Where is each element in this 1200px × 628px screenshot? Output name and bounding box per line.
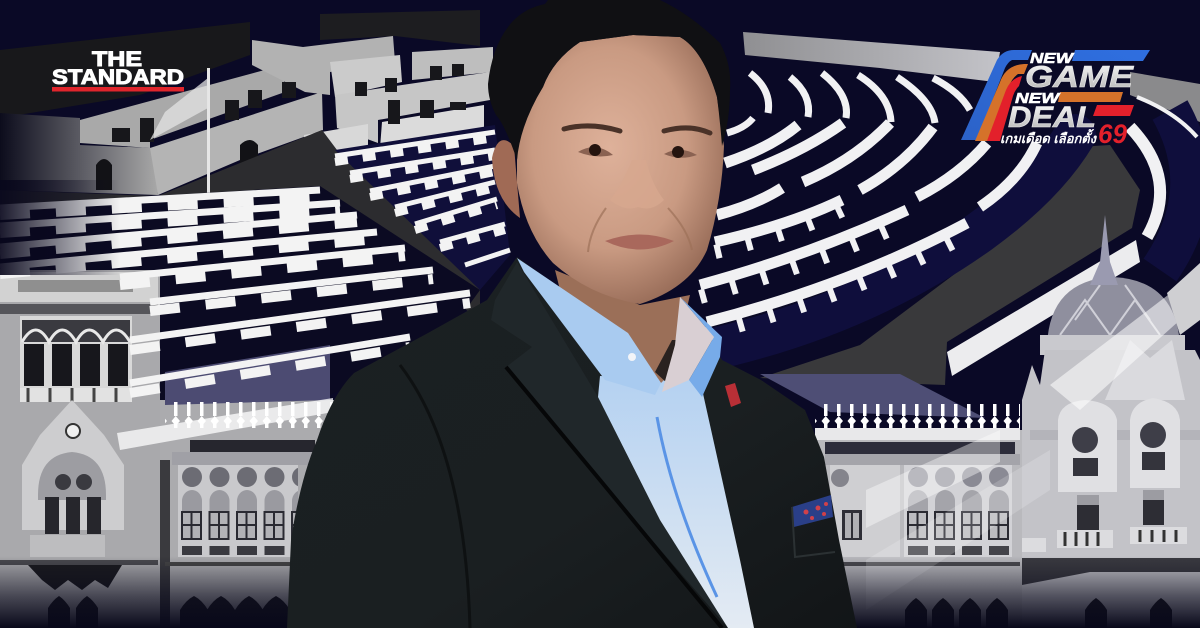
chamber: right upper wall [743,32,1200,122]
chamber: upper left walls [0,36,493,195]
left lapel [491,262,728,628]
red stripes [987,76,1134,141]
pocket flap [792,507,835,557]
chamber floor left [0,130,480,320]
logo: New Game New Deal 69 [961,50,1150,149]
building: dome [1040,215,1185,355]
chamber: right dark seat band [700,110,1190,352]
right collar inner [662,297,714,392]
chamber: right seating arcs [700,73,1197,334]
left seats dark mass [0,186,480,430]
person [287,0,857,628]
jacket [287,257,857,628]
tagline: เกมเดือด เลือกตั้ง [1000,128,1098,146]
collar button [628,353,636,361]
neck [555,270,690,383]
logo: THE STANDARD: STANDARD [52,66,184,89]
flag pole and flag [150,68,210,228]
ear [492,140,520,218]
chamber: upper left dark gallery [0,10,480,118]
chamber: left seating rows [0,190,470,393]
shirt placket [657,417,717,597]
left edge fade [0,180,120,275]
face [517,35,724,304]
lapel shadow [506,367,722,628]
translucent row across left facade [117,398,333,450]
chamber: floor right [760,145,1140,385]
game: GAME [1025,59,1135,94]
bottom fade [0,556,1200,628]
translucent diagonal light bands [866,263,1200,610]
nasolabial folds [588,208,692,252]
eyes [578,144,697,158]
building: left wing [150,345,340,628]
69: 69 [1098,119,1127,149]
shirt body [598,376,754,628]
pocket square dots [804,502,828,520]
logo: THE STANDARD [52,48,184,92]
logo: THE STANDARD: THE [92,48,142,71]
navy seats block [335,125,510,290]
chamber: right front desk [947,240,1140,376]
speaker figures [96,140,258,195]
building: left tower [0,270,160,628]
deal: DEAL [1008,101,1096,134]
right collar outer [680,297,722,397]
new: NEW [1030,50,1075,67]
arm seam [400,365,470,628]
new: NEW [1015,90,1061,107]
building: right wing [815,430,1030,628]
neck inner shadow [655,340,680,384]
building: left wing white balustrade [165,402,335,428]
pin [725,383,741,407]
building: right roof [760,374,985,418]
orange stripes [975,64,1123,141]
eyebrows [564,126,710,133]
chamber: centre seating rows [335,125,510,290]
hair [488,0,730,160]
blue stripes [961,50,1150,140]
building: right tower [1022,340,1200,628]
pocket square [792,495,833,527]
nose [610,160,664,208]
left collar [517,258,661,395]
gallery occupants [112,64,466,142]
mouth [605,234,674,250]
building: right white balustrade [815,404,1020,440]
